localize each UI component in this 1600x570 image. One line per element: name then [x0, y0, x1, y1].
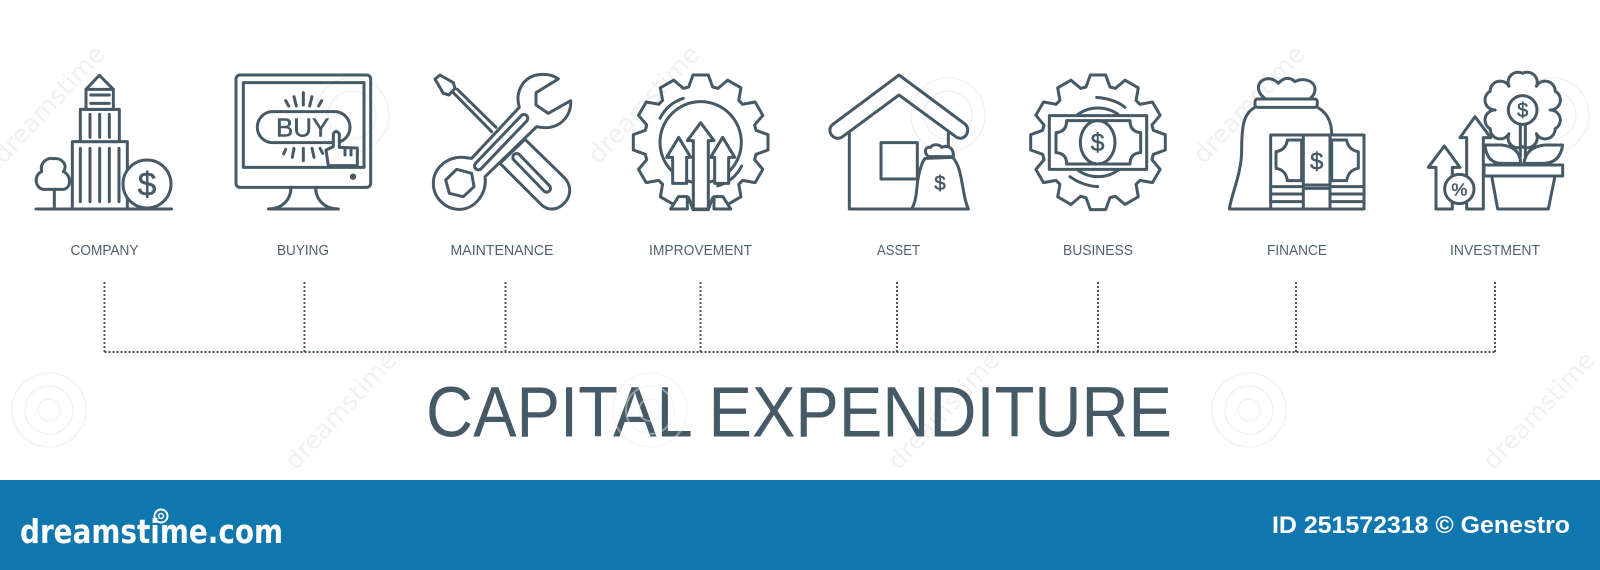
- icon: investment flower pot and arrows: %: [1451, 179, 1467, 199]
- dotted connector: [104, 282, 1495, 352]
- icon: asset house with money bag: [830, 75, 968, 209]
- watermark overlay on title: [613, 373, 687, 447]
- watermark pattern: dreamstime: [882, 345, 1006, 475]
- label: investment: INVESTMENT: [1450, 243, 1540, 259]
- icon: investment flower pot and arrows: [1428, 72, 1563, 209]
- icon: buying monitor: [236, 75, 371, 209]
- icon: finance money bag with banknotes: $: [1310, 148, 1323, 175]
- watermark pattern: dreamstime: [279, 345, 403, 475]
- title: CAPITAL EXPENDITURE: [426, 374, 1172, 452]
- label: maintenance: MAINTENANCE: [450, 243, 554, 259]
- label: finance: FINANCE: [1267, 243, 1327, 259]
- footer banner: [0, 480, 1600, 570]
- watermark pattern: dreamstime: [1187, 39, 1311, 169]
- icon: company building with coin: [36, 75, 172, 209]
- icon: company building with coin: $: [138, 167, 156, 204]
- icon: improvement gear with arrows: [633, 75, 768, 210]
- watermark pattern: [0, 39, 1600, 475]
- icon: business gear with banknote: $: [1091, 130, 1105, 157]
- label: improvement: IMPROVEMENT: [649, 243, 752, 259]
- icon: maintenance tools: [433, 74, 571, 209]
- watermark pattern: dreamstime: [582, 39, 706, 169]
- label: company: COMPANY: [70, 243, 139, 259]
- label: business: BUSINESS: [1063, 243, 1133, 259]
- icon: investment flower pot and arrows: $: [1517, 100, 1528, 122]
- icon: buying monitor: BUY: [276, 113, 329, 143]
- icon: finance money bag with banknotes: [1229, 78, 1364, 209]
- image id and credit: ID 251572318 © Genestro: [1272, 512, 1570, 539]
- watermark pattern: dreamstime: [1477, 345, 1600, 475]
- label: asset: ASSET: [877, 243, 920, 259]
- icon: business gear with banknote: [1031, 75, 1165, 210]
- label: buying: BUYING: [277, 243, 329, 259]
- brand logo text: dreamstime.com: [20, 512, 283, 551]
- icon: asset house with money bag: $: [934, 172, 946, 195]
